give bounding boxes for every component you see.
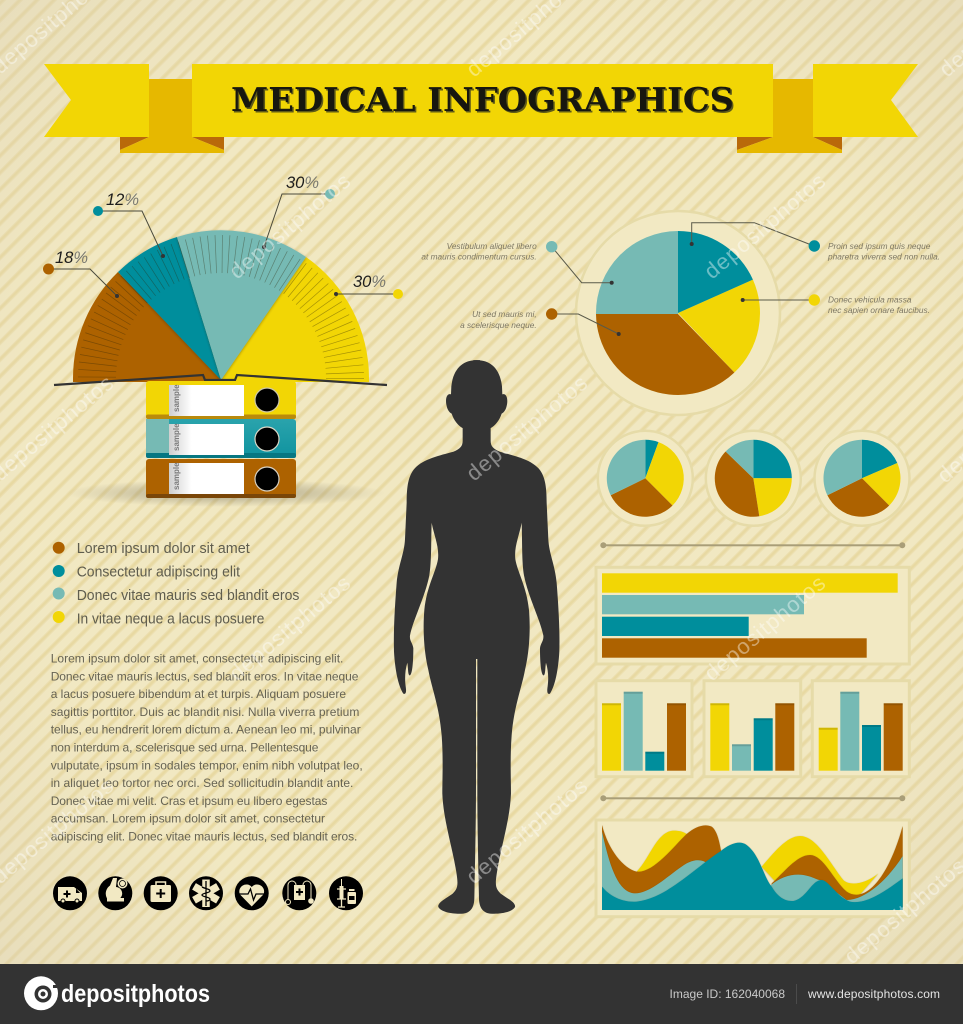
pie callout: teal [690,223,940,262]
ribbon right fold [737,79,842,153]
pie callout: light teal [421,241,614,285]
callout 30% light teal: 30% [286,174,319,192]
human body silhouette [394,360,559,914]
small pie 2 [706,431,801,526]
pie callout: light teal: at mauris condimentum cursus. [421,252,537,262]
binder: yellow: sample [172,384,181,412]
body text: in aliquet leo tortor nec orci. Sed sollicitudin blandit ante. [51,776,353,790]
body text: Lorem ipsum dolor sit amet, consectetur adipiscing elit. [51,652,343,666]
icon: heart with pulse [235,876,269,910]
semicircle chart [54,230,388,386]
column chart 3 [812,681,909,777]
body text: vulputate, ipsum in sodales tempor, enim nibh volutpat leo, [51,758,363,772]
slice: teal [678,231,753,313]
watermarks: depositphotos [224,570,355,686]
pie callout: yellow: nec sapien ornare faucibus. [828,305,930,315]
layer: teal [602,843,903,910]
pie callout: light teal: Vestibulum aliquet libero [447,241,537,251]
column chart 2 [704,681,801,777]
wedge: light teal 30% [177,230,306,380]
legend [53,541,299,628]
bar panel [596,567,909,664]
icon: first aid kit [144,876,178,910]
small pie 1 [598,431,693,526]
icon: IV bag [282,876,316,910]
layer: brown [602,825,903,910]
body text: a lacus posuere bibendum at et turpis. Aliquam posuere [51,687,346,701]
watermarks: depositphotos [461,773,592,889]
legend: Donec vitae mauris sed blandit eros [77,588,299,604]
layer: light teal [602,832,903,910]
footer logo text: depositphotos [61,980,210,1008]
footer separator [796,984,797,1004]
medical icon row [53,876,363,910]
body text: adipiscing elit. Donec vitae mauris lectus, sed blandit eros. [51,830,357,844]
bar: yellow [602,573,898,593]
footer logo camera [24,976,58,1010]
area panel [596,820,909,917]
wedge: brown 18% [73,272,221,382]
legend: In vitae neque a lacus posuere [77,612,264,628]
base line [54,375,387,385]
icon: microscope [98,876,132,910]
body text: Donec vitae mi velit. Cras et ipsum eu libero egestas [51,794,327,808]
slice: yellow [678,280,760,372]
body text: sagittis porttitor. Duis ac blandit nisi. Nulla viverra pretium [51,705,359,719]
callout 18% [43,249,119,298]
title: MEDICAL INFOGRAPHICS [232,82,736,120]
area chart [596,820,909,917]
title ribbon [44,64,918,153]
ribbon center band [192,64,773,137]
divider bottom [600,795,905,801]
title: MEDICAL INFOGRAPHICS [231,80,734,119]
body text: accumsan. Lorem ipsum dolor sit amet, consectetur [51,812,325,826]
slice: brown [596,314,734,395]
legend: Lorem ipsum dolor sit amet [77,541,250,557]
body text [51,652,363,844]
pie callout: brown: a scelerisque neque. [460,320,537,330]
binder: brown [146,459,296,498]
icon: syringe and vial [329,876,363,910]
small pie 3 [814,431,910,526]
callout 12%: 12% [106,191,139,209]
binder: brown: sample [172,462,181,490]
pie callout: yellow: Donec vehicula massa [828,294,912,304]
binder: yellow [146,381,296,419]
callout 12% [93,191,165,258]
pie callout: brown: Ut sed mauris mi, [472,309,537,319]
watermarks: depositphotos [224,168,355,284]
column chart 1 [596,681,692,777]
wedge: yellow 30% [221,257,369,382]
pie callout: brown [460,308,621,336]
radial tick marks [78,235,364,379]
image id: Image ID: 162040068 [670,987,785,1001]
horizontal bar chart [596,567,909,664]
legend: Consectetur adipiscing elit [77,564,240,580]
body text: tellus, eu hendrerit lorem dictum a. Aenean leo mi, pulvinar [51,723,361,737]
website: www.depositphotos.com [807,987,940,1001]
body text: Donec vitae mauris lectus, sed blandit eros. In vitae neque [51,669,359,683]
footer bar [0,964,963,1024]
bar: brown [602,638,867,658]
slice: light teal [596,231,678,314]
callout 30% yellow: 30% [353,273,386,291]
wedge: teal 12% [118,237,221,380]
area layers [602,825,903,910]
ribbon right tail [813,64,918,137]
divider top [600,542,905,548]
large pie chart [576,211,780,415]
layer: yellow [637,831,878,898]
watermarks: depositphotos [461,370,592,486]
callout 18%: 18% [55,249,88,267]
watermarks: depositphotos [699,168,830,284]
binder stack [65,381,385,507]
body text: non interdum a, scelerisque sed urna. Pellentesque [51,740,319,754]
binder shadow [65,479,385,507]
ribbon left tail [44,64,149,137]
pie ring [576,211,780,415]
bar: light teal [602,595,804,614]
bar: teal [602,617,749,636]
icon: star of life with caduceus [189,876,223,910]
watermarks: depositphotos [699,570,830,686]
pie callout: yellow [741,294,930,315]
binder: teal [146,419,296,458]
pie callout: teal: pharetra viverra sed non nulla. [827,252,940,262]
pie callout: teal: Proin sed ipsum quis neque [828,241,931,251]
icon: ambulance [53,876,87,910]
binder: teal: sample [172,423,181,451]
callout 30% yellow [334,273,403,299]
callout 30% light teal [262,174,335,249]
ribbon left fold [120,79,224,153]
